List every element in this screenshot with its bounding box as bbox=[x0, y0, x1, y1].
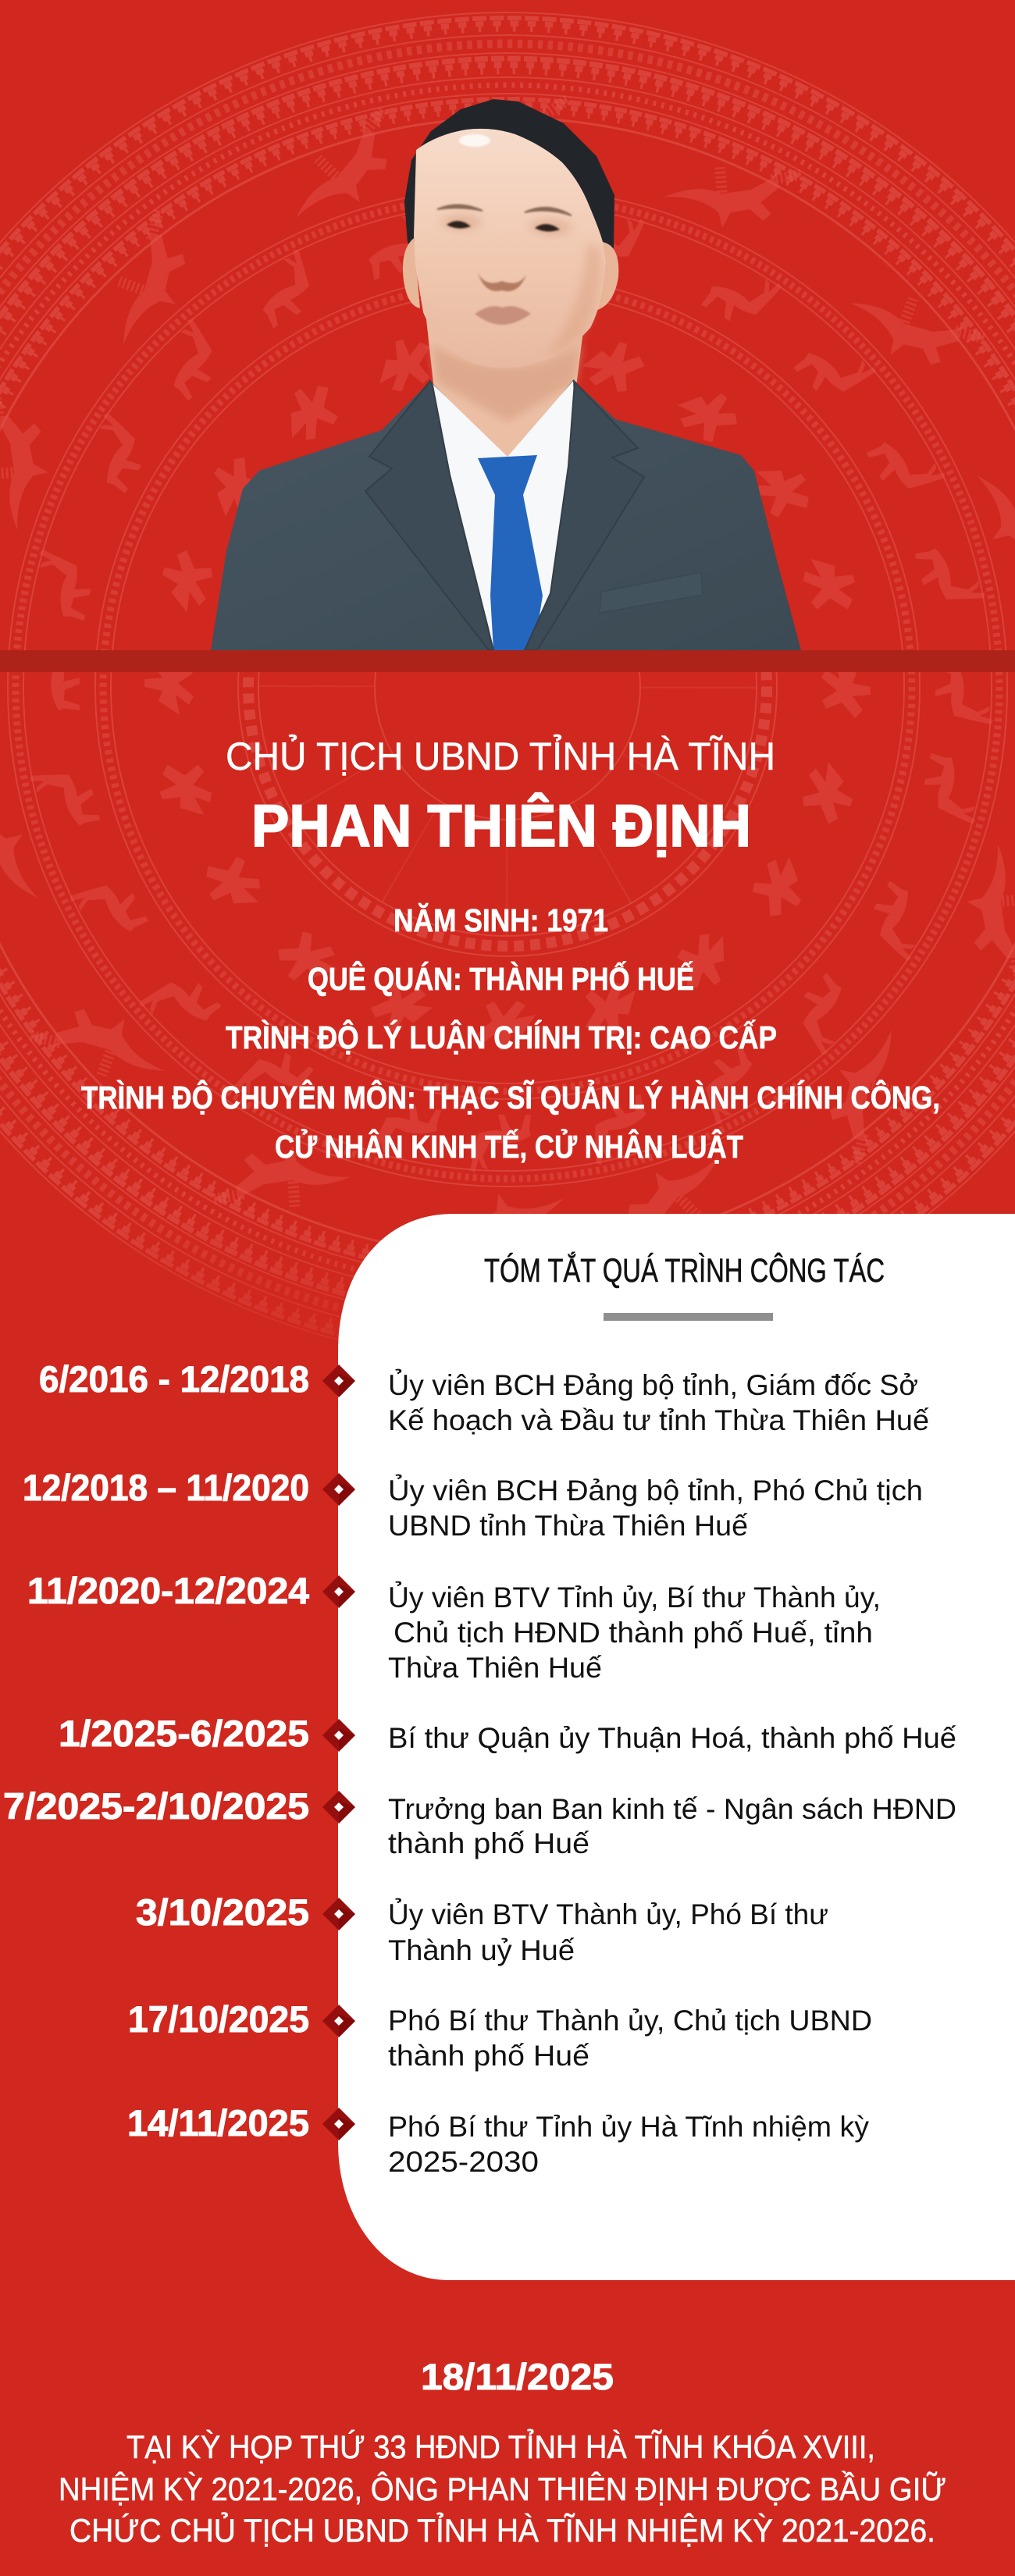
date: 1/2025-6/2025 bbox=[59, 1713, 309, 1754]
portrait photo bbox=[211, 99, 801, 650]
suit pocket bbox=[600, 572, 703, 613]
closing statement bbox=[59, 2428, 946, 2549]
tie bbox=[478, 455, 543, 650]
drum pattern background bbox=[0, 12, 1015, 1340]
panel heading: TÓM TẮT QUÁ TRÌNH CÔNG TÁC bbox=[484, 1251, 885, 1290]
date: 17/10/2025 bbox=[128, 1998, 309, 2040]
forehead highlight bbox=[459, 134, 490, 147]
ears bbox=[403, 238, 618, 311]
face bbox=[414, 129, 606, 368]
description: Kế hoạch và Đầu tư tỉnh Thừa Thiên Huế bbox=[388, 1404, 929, 1436]
timeline item 2 bbox=[23, 1467, 923, 1542]
left lapel bbox=[365, 381, 493, 650]
timeline item 6 bbox=[136, 1891, 828, 1966]
heading: name: PHAN THIÊN ĐỊNH bbox=[251, 792, 751, 859]
suit jacket bbox=[211, 380, 801, 650]
description: Trưởng ban Ban kinh tế - Ngân sách HĐND bbox=[388, 1793, 956, 1825]
icon: diamond bbox=[322, 2005, 355, 2037]
eyebrows bbox=[437, 205, 572, 215]
eye sockets bbox=[439, 215, 574, 236]
date: 11/2020-12/2024 bbox=[27, 1570, 309, 1611]
icon: diamond bbox=[322, 1791, 355, 1823]
panel: career summary bbox=[338, 1214, 1015, 2280]
description: Phó Bí thư Thành ủy, Chủ tịch UBND bbox=[388, 2005, 872, 2037]
icon: diamond bbox=[322, 1719, 355, 1752]
date: 14/11/2025 bbox=[127, 2102, 309, 2144]
statement line 3: CHỨC CHỦ TỊCH UBND TỈNH HÀ TĨNH NHIỆM KỲ 2021-2026. bbox=[69, 2511, 935, 2549]
description: Bí thư Quận ủy Thuận Hoá, thành phố Huế bbox=[388, 1722, 956, 1754]
icon: diamond bbox=[322, 1364, 355, 1397]
description: thành phố Huế bbox=[388, 1827, 589, 1859]
closing date: 18/11/2025 bbox=[421, 2356, 614, 2397]
professional level line 2: CỬ NHÂN KINH TẾ, CỬ NHÂN LUẬT bbox=[275, 1129, 743, 1165]
political level: TRÌNH ĐỘ LÝ LUẬN CHÍNH TRỊ: CAO CẤP bbox=[226, 1019, 777, 1055]
icon: diamond bbox=[322, 1898, 355, 1930]
timeline item 1 bbox=[39, 1358, 929, 1436]
statement line 2: NHIỆM KỲ 2021-2026, ÔNG PHAN THIÊN ĐỊNH ĐƯỢC BẦU GIỮ bbox=[59, 2471, 946, 2507]
description: UBND tỉnh Thừa Thiên Huế bbox=[388, 1510, 748, 1542]
nose bbox=[478, 273, 526, 291]
neck bbox=[426, 312, 586, 461]
description: Thành uỷ Huế bbox=[388, 1934, 575, 1966]
date: 12/2018 – 11/2020 bbox=[23, 1467, 309, 1508]
timeline item 3 bbox=[27, 1570, 881, 1684]
description: Phó Bí thư Tỉnh ủy Hà Tĩnh nhiệm kỳ bbox=[388, 2111, 870, 2143]
right lapel bbox=[525, 380, 644, 650]
band under portrait bbox=[0, 650, 1015, 672]
heading underline bbox=[604, 1313, 773, 1321]
heading: position: CHỦ TỊCH UBND TỈNH HÀ TĨNH bbox=[226, 734, 775, 778]
date: 6/2016 - 12/2018 bbox=[39, 1358, 309, 1400]
hair base bbox=[404, 99, 614, 248]
icon: diamond bbox=[322, 2108, 355, 2140]
icon: diamond bbox=[322, 1575, 355, 1608]
statement line 1: TẠI KỲ HỌP THỨ 33 HĐND TỈNH HÀ TĨNH KHÓA XVIII, bbox=[126, 2428, 875, 2465]
shirt bbox=[430, 381, 576, 650]
mouth bbox=[475, 306, 531, 325]
birth year: NĂM SINH: 1971 bbox=[394, 902, 608, 938]
date: 7/2025-2/10/2025 bbox=[3, 1785, 309, 1827]
timeline item 8 bbox=[127, 2102, 870, 2178]
icon: diamond bbox=[322, 1473, 355, 1506]
timeline item 7 bbox=[128, 1998, 872, 2072]
timeline item 5 bbox=[3, 1785, 956, 1859]
description: 2025-2030 bbox=[388, 2146, 539, 2178]
timeline item 4 bbox=[59, 1713, 956, 1754]
description: Ủy viên BTV Tỉnh ủy, Bí thư Thành ủy, bbox=[388, 1581, 881, 1614]
date: 3/10/2025 bbox=[136, 1891, 309, 1933]
eyes bbox=[447, 221, 560, 232]
description: Chủ tịch HĐND thành phố Huế, tỉnh bbox=[394, 1617, 873, 1649]
home town: QUÊ QUÁN: THÀNH PHỐ HUẾ bbox=[308, 961, 694, 997]
personal info block bbox=[81, 902, 940, 1165]
neck shadow bbox=[431, 343, 582, 422]
description: thành phố Huế bbox=[388, 2040, 589, 2072]
description: Ủy viên BTV Thành ủy, Phó Bí thư bbox=[388, 1898, 828, 1930]
face shading bbox=[418, 242, 601, 355]
description: Thừa Thiên Huế bbox=[388, 1652, 602, 1684]
description: Ủy viên BCH Đảng bộ tỉnh, Giám đốc Sở bbox=[388, 1368, 918, 1401]
description: Ủy viên BCH Đảng bộ tỉnh, Phó Chủ tịch bbox=[388, 1474, 923, 1507]
